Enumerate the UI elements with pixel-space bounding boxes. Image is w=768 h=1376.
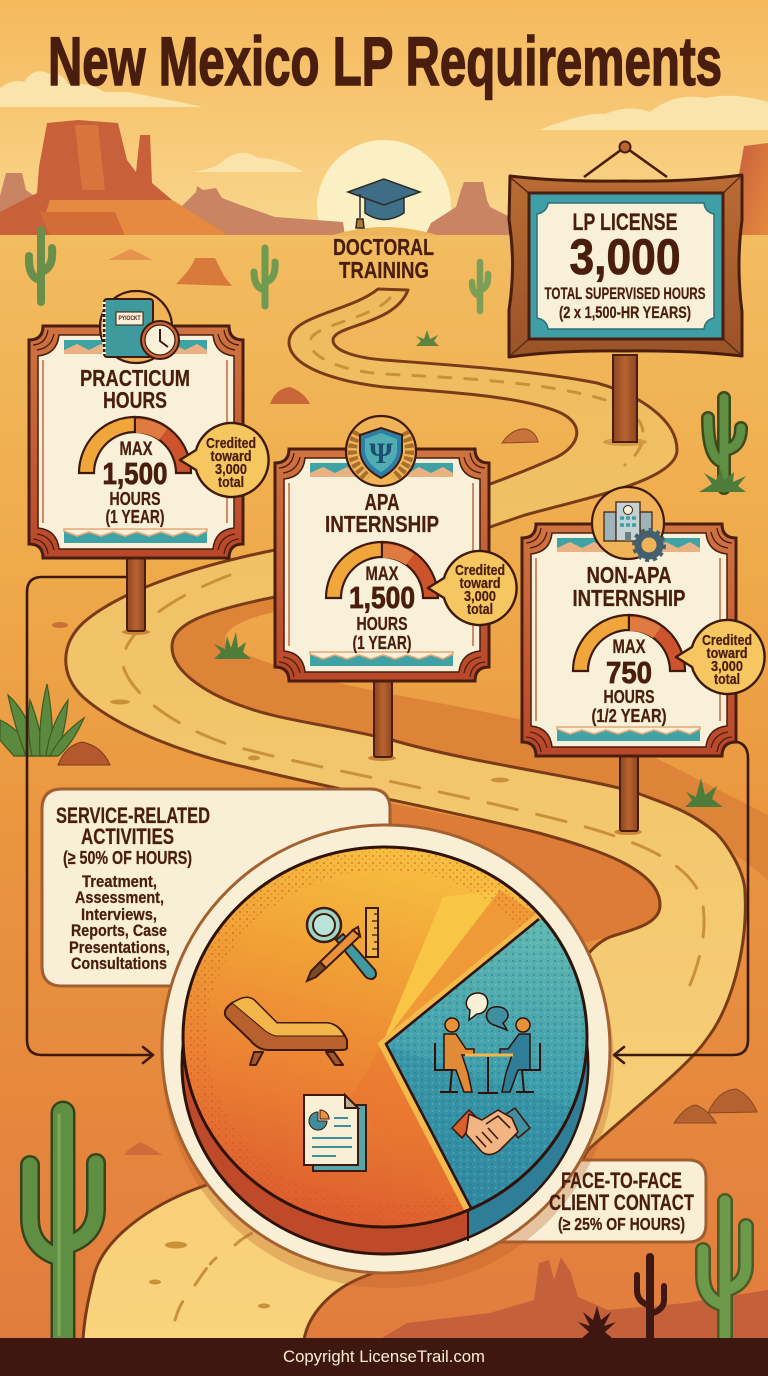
panel: face-to-face client contact [500, 1160, 706, 1242]
text: doctoral training: TRAINING [339, 257, 429, 283]
text: max hours: HOURS [110, 489, 160, 509]
panel: service-related activities [42, 789, 390, 986]
icon: graduation cap [348, 179, 420, 228]
sun [317, 140, 451, 274]
callout: credited toward total [676, 620, 765, 694]
text: face-to-face labels: FACE-TO-FACE [561, 1168, 682, 1193]
pie outer ring [162, 825, 610, 1273]
pie side extrusion [180, 1043, 590, 1256]
small rocks and mounds [52, 249, 538, 628]
mesa silhouette at bottom [382, 1257, 768, 1338]
heading: APA internship: APA [364, 489, 400, 515]
text: max hours [349, 564, 415, 653]
text: max hours: 1,500 [102, 456, 168, 491]
icon: dark cactus silhouette [637, 1257, 664, 1342]
panel background [42, 789, 390, 986]
list of activities: Reports, Case [71, 921, 167, 940]
callout: credited toward total: 3,000 [711, 658, 743, 675]
clouds [0, 71, 768, 172]
footer bar [0, 1338, 768, 1376]
text: 3,000: 3,000 [570, 229, 680, 285]
sign post: practicum [122, 555, 150, 635]
callout: credited toward total: toward [706, 645, 748, 662]
icon: large cactus bottom left [30, 1113, 96, 1345]
icon: notebook and clock [100, 291, 179, 363]
icon: dark agave silhouette [578, 1306, 616, 1338]
list of activities: Consultations [71, 954, 167, 973]
far mesas [0, 173, 512, 236]
text: max hours: HOURS [604, 687, 654, 707]
text: years note: (2 x 1,500-HR YEARS) [559, 304, 691, 322]
panel: APA internship sign [275, 416, 517, 681]
sign post: APA internship [368, 680, 396, 761]
callout: credited toward total: total [714, 671, 740, 688]
icon: rocks lower right [674, 1089, 757, 1123]
list of activities [69, 872, 170, 973]
icon: hospital building and gear [592, 487, 664, 560]
icon: cactus top middle [254, 248, 275, 306]
cream plaque [537, 203, 714, 329]
icon: agave right cactus [699, 470, 746, 492]
icon: cactus top right [472, 262, 488, 311]
sign post: non-APA internship [614, 754, 642, 835]
pie face: client contact slice [388, 918, 586, 1207]
icon: psi shield with laurel: Ψ [369, 437, 393, 470]
wooden frame [509, 175, 742, 357]
text: face-to-face labels: CLIENT CONTACT [549, 1190, 694, 1215]
heading: practicum hours [80, 365, 190, 413]
hanger wire [584, 147, 667, 177]
slice divider [382, 916, 539, 1210]
panel: LP license sign [509, 142, 742, 357]
panel: non-APA internship sign [522, 487, 765, 756]
background sky [0, 0, 768, 240]
heading: APA internship [325, 489, 439, 537]
callout: credited toward total: toward [460, 575, 500, 592]
text: doctoral training [333, 234, 434, 283]
frame [522, 524, 736, 756]
heading: non-APA internship [572, 562, 686, 611]
list of activities: Assessment, [75, 888, 164, 907]
list of activities: Treatment, [82, 872, 157, 891]
pie ring shadow [162, 836, 614, 1288]
road centre dashes [122, 298, 704, 1320]
callout: credited toward total: Credited [702, 632, 752, 649]
gauge [573, 615, 685, 671]
text: max hours: MAX [612, 637, 646, 658]
panel: practicum sign [29, 291, 269, 558]
icon: magnifier, brush and ruler [307, 908, 378, 981]
frame inner [529, 193, 723, 339]
arrow: right connector into pie [614, 741, 748, 1063]
callout: credited toward total: total [218, 474, 244, 491]
text: max hours: MAX [120, 439, 153, 460]
pie chart [162, 825, 640, 1288]
text: max hours: 750 [606, 655, 652, 690]
frame [29, 326, 243, 558]
pie outline [183, 847, 587, 1227]
icon: small agave middle [214, 632, 251, 659]
heading: (≥ 50% OF HOURS) [63, 848, 192, 868]
heading: APA internship: INTERNSHIP [325, 511, 439, 537]
footer copyright: Copyright LicenseTrail.com [283, 1348, 485, 1366]
list of activities: Presentations, [69, 938, 170, 957]
icon: therapy chaise [225, 998, 347, 1065]
frame [275, 449, 489, 681]
icon: report document [304, 1095, 366, 1171]
darker ground bands [165, 590, 768, 880]
text: max hours: 1,500 [349, 580, 415, 615]
icon: cactus top left [29, 230, 52, 302]
heading: non-APA internship: NON-APA [586, 562, 672, 588]
icon: psi shield with laurel [346, 416, 416, 486]
list of activities: Interviews, [81, 905, 157, 924]
text: LP license: LP LICENSE [572, 209, 678, 236]
text: max hours: (1 YEAR) [352, 633, 412, 653]
icon: large agave left [0, 684, 84, 756]
text: doctoral training: DOCTORAL [333, 234, 434, 260]
small mound lower left [123, 1142, 162, 1155]
pie face: service-related slice [184, 848, 540, 1226]
winding road [66, 289, 745, 1340]
heading [56, 803, 210, 868]
gauge [79, 417, 191, 473]
callout: credited toward total: total [467, 601, 493, 618]
frame miter lines [511, 177, 740, 355]
text: max hours: MAX [366, 564, 399, 585]
heading: ACTIVITIES [81, 824, 174, 849]
text: total supervised hours: TOTAL SUPERVISED HOURS [544, 285, 706, 303]
callout: credited toward total: toward [210, 448, 252, 465]
callout: credited toward total: Credited [455, 562, 505, 579]
text: face-to-face labels [549, 1168, 694, 1234]
big mesa [0, 120, 226, 236]
text: max hours: (1 YEAR) [106, 507, 165, 527]
icon: notebook and clock: PYIOCKT [118, 316, 141, 322]
callout: credited toward total: 3,000 [215, 461, 247, 478]
text: face-to-face labels: (≥ 25% OF HOURS) [558, 1214, 685, 1234]
callout: credited toward total: Credited [206, 435, 256, 452]
text: max hours [102, 439, 168, 527]
text: max hours: HOURS [356, 614, 408, 634]
callout: credited toward total [428, 551, 517, 625]
icon: rock left [58, 742, 110, 765]
icon: cactus right [708, 398, 741, 488]
icon: handshake [452, 1108, 530, 1155]
heading: SERVICE-RELATED [56, 803, 210, 828]
arrow: left connector into pie [27, 577, 153, 1063]
text: max hours: (1/2 YEAR) [592, 706, 666, 726]
sign post: LP license [603, 355, 647, 446]
heading: non-APA internship: INTERNSHIP [572, 585, 686, 611]
gauge [326, 542, 438, 598]
heading: practicum hours: HOURS [103, 387, 167, 413]
icon: small agave right [685, 778, 723, 807]
text: max hours [592, 637, 666, 726]
icon: cactus bottom right [703, 1201, 746, 1345]
callout: credited toward total [180, 423, 269, 497]
heading: practicum hours: PRACTICUM [80, 365, 190, 391]
callout: credited toward total: 3,000 [464, 588, 496, 605]
icon: people at a table [435, 993, 540, 1093]
far right mesa [738, 143, 768, 236]
icon: small agave near road top [416, 330, 439, 346]
nail [620, 142, 630, 152]
